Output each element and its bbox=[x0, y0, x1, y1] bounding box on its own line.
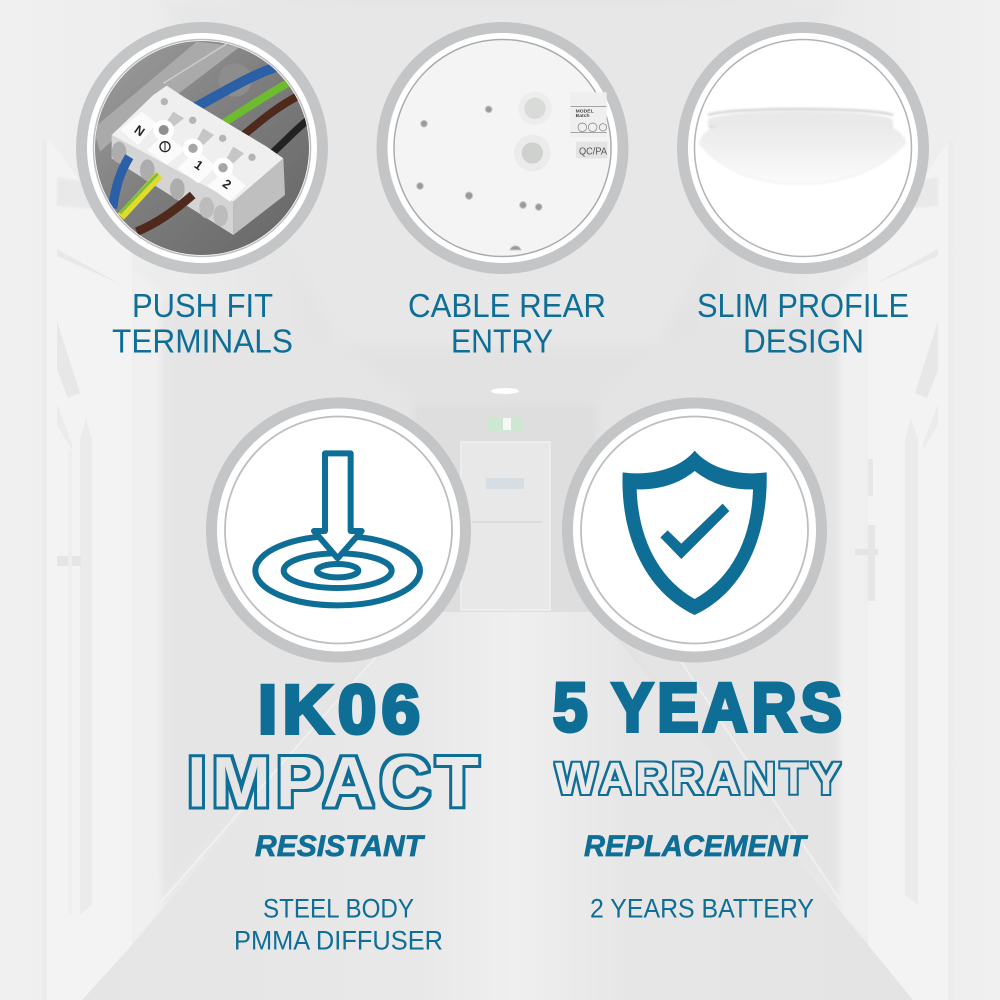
text block: steel body, PMMA diffuser: STEEL BODY bbox=[263, 894, 414, 924]
headline: WARRANTY outlined: WARRANTY bbox=[555, 753, 841, 804]
heading: slim profile design: DESIGN bbox=[743, 324, 864, 360]
heading: slim profile design: SLIM PROFILE bbox=[697, 288, 909, 325]
heading: slim profile design bbox=[697, 288, 909, 360]
terminal block bbox=[112, 86, 285, 235]
photo badge: slim profile design bbox=[677, 22, 929, 274]
subheading: replacement: REPLACEMENT bbox=[584, 830, 809, 863]
ceiling light product bbox=[699, 109, 906, 184]
heading: push fit terminals: PUSH FIT bbox=[132, 288, 273, 325]
back door bbox=[461, 442, 550, 610]
photo badge: push fit terminals bbox=[76, 22, 328, 274]
exit sign bbox=[487, 417, 523, 431]
right door bbox=[868, 140, 953, 1000]
icon badge: impact arrow on target bbox=[206, 398, 471, 662]
headline: IMPACT outlined: IMPACT bbox=[187, 744, 479, 822]
heading: cable rear entry bbox=[408, 288, 606, 360]
wires behind terminal bbox=[190, 67, 310, 155]
ceiling light bbox=[491, 388, 519, 394]
heading: push fit terminals bbox=[112, 288, 293, 360]
heading: cable rear entry: ENTRY bbox=[451, 324, 553, 360]
heading: push fit terminals: TERMINALS bbox=[112, 324, 293, 360]
left door bbox=[42, 140, 132, 1000]
subheading: resistant: RESISTANT bbox=[255, 830, 426, 863]
headline: IK06: IK06 bbox=[258, 671, 420, 748]
product label: Batch bbox=[576, 113, 590, 119]
QC label bbox=[576, 142, 607, 158]
heading: cable rear entry: CABLE REAR bbox=[408, 288, 606, 325]
product label: MODEL bbox=[576, 108, 594, 114]
QC label: QC/PA bbox=[579, 146, 607, 157]
product label bbox=[570, 92, 607, 137]
terminal block: 1 bbox=[192, 158, 205, 173]
text block: steel body, PMMA diffuser: PMMA DIFFUSER bbox=[234, 926, 443, 956]
photo badge: cable rear entry bbox=[376, 22, 628, 274]
headline: 5 YEARS: 5 YEARS bbox=[553, 669, 842, 746]
text block: 2 years battery: 2 YEARS BATTERY bbox=[590, 894, 814, 924]
terminal block: N bbox=[132, 123, 147, 139]
icon badge: warranty shield with check bbox=[562, 398, 827, 662]
floor bbox=[82, 612, 913, 1000]
terminal block: 2 bbox=[220, 177, 234, 192]
text block: steel body, PMMA diffuser bbox=[234, 894, 443, 956]
